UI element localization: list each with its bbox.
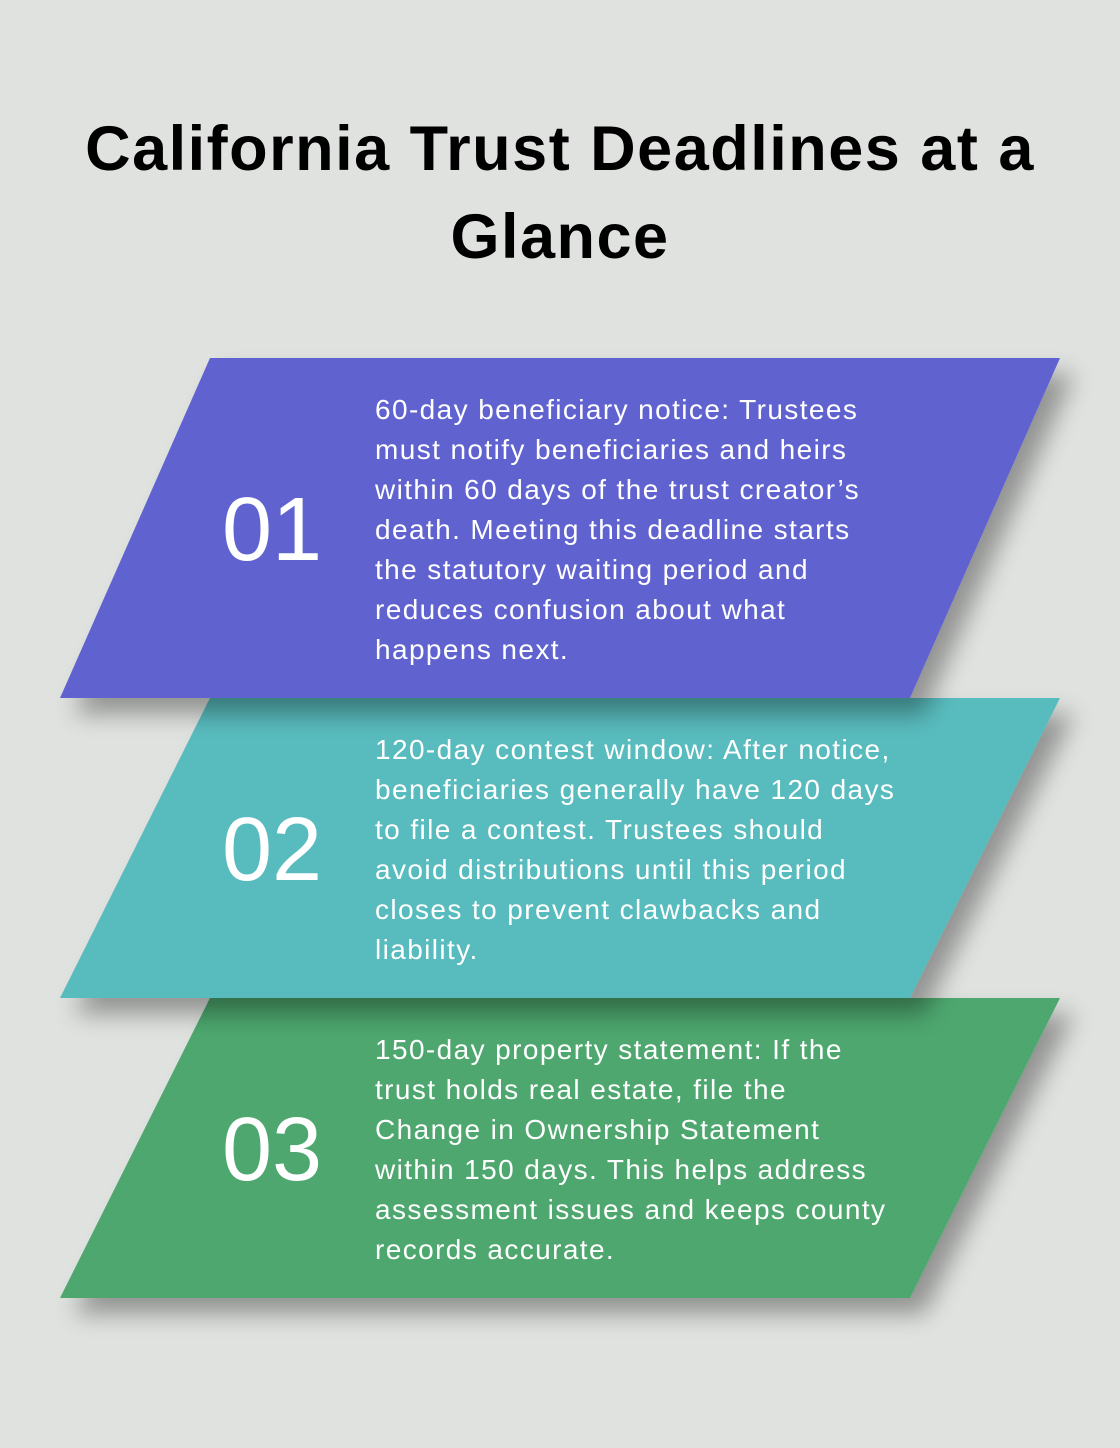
text 2: closes to prevent clawbacks and [375, 894, 822, 925]
text 3: 150-day property statement: If the [375, 1034, 843, 1065]
panel 1 shape [60, 358, 1060, 698]
text 1: the statutory waiting period and [375, 554, 809, 585]
panel 2 shape [60, 698, 1060, 998]
text 1: 60-day beneficiary notice: Trustees [375, 394, 858, 425]
title: California Trust Deadlines at a [85, 114, 1035, 184]
text 2: to file a contest. Trustees should [375, 814, 824, 845]
number 02: 02 [222, 800, 322, 900]
text 1: must notify beneficiaries and heirs [375, 434, 847, 465]
text 3: within 150 days. This helps address [375, 1154, 867, 1185]
text 1: happens next. [375, 634, 569, 665]
title [85, 114, 1035, 272]
title: Glance [450, 202, 670, 272]
text 1: within 60 days of the trust creator’s [375, 474, 860, 505]
text 2: liability. [375, 934, 479, 965]
text 1 [375, 394, 860, 665]
text 3: Change in Ownership Statement [375, 1114, 820, 1145]
number 01: 01 [222, 480, 322, 580]
text 2 [375, 734, 895, 965]
text 2: 120-day contest window: After notice, [375, 734, 891, 765]
text 2: beneficiaries generally have 120 days [375, 774, 895, 805]
text 3: records accurate. [375, 1234, 615, 1265]
number 03: 03 [222, 1100, 322, 1200]
text 3 [375, 1034, 886, 1265]
text 1: death. Meeting this deadline starts [375, 514, 850, 545]
text 3: assessment issues and keeps county [375, 1194, 886, 1225]
text 1: reduces confusion about what [375, 594, 786, 625]
panel 3 shape [60, 998, 1060, 1298]
text 3: trust holds real estate, file the [375, 1074, 787, 1105]
text 2: avoid distributions until this period [375, 854, 847, 885]
